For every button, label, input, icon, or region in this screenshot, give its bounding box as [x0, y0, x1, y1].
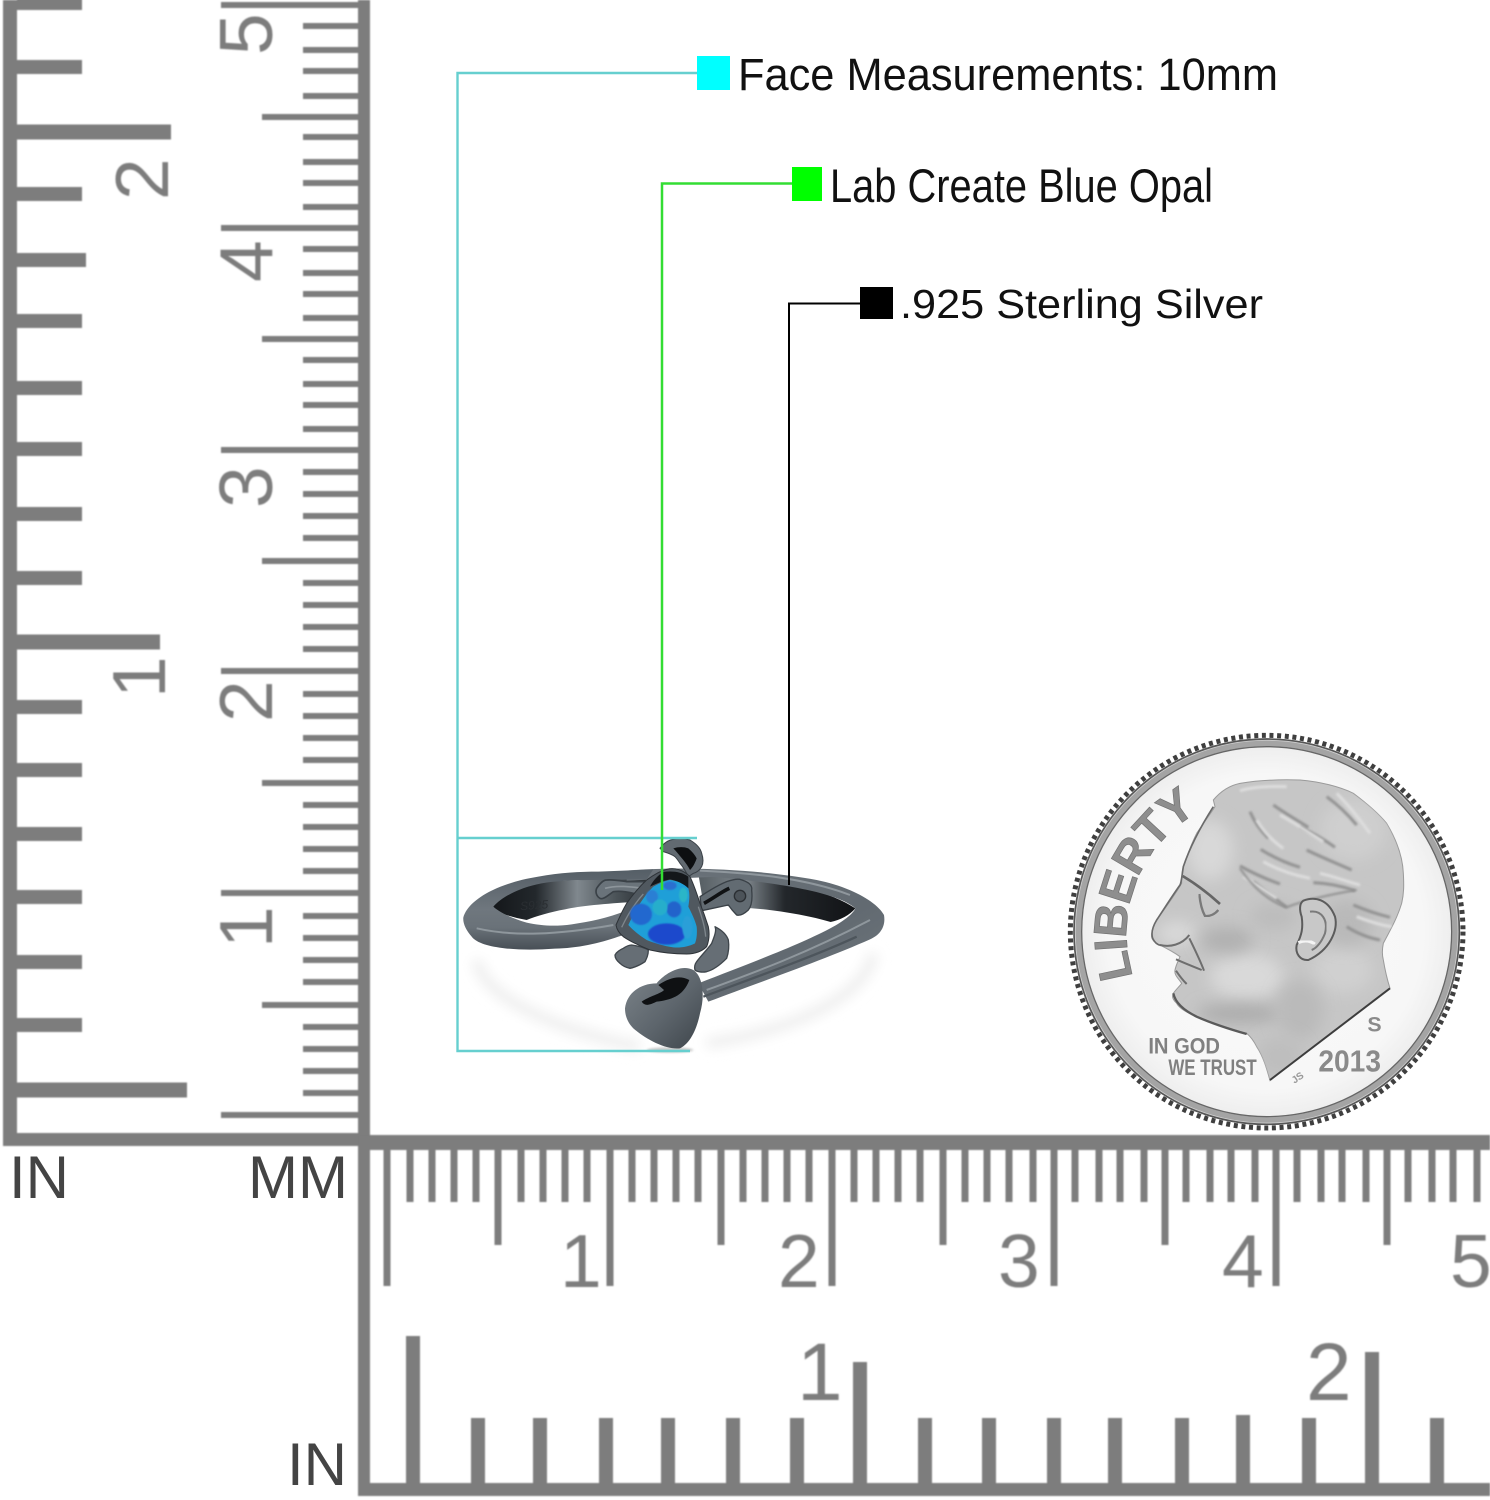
shell rim [616, 869, 709, 954]
shadow below heart [647, 1047, 693, 1053]
unit labels: IN [9, 1144, 69, 1211]
rotated scale numbers: 2 [204, 680, 288, 722]
vertical ruler: left side inches and millimetres [3, 0, 370, 1146]
inch numbers: 1 [797, 1327, 843, 1418]
coin field [1082, 747, 1452, 1117]
top edge behind turtle [627, 869, 720, 881]
face profile edge [1152, 807, 1213, 945]
rotated scale numbers [97, 13, 288, 948]
measurement bracket: face height [458, 73, 697, 1051]
hair strands light [1240, 786, 1392, 927]
leader line: metal [789, 304, 860, 885]
dime for scale: JS [1290, 1070, 1306, 1086]
black swatch [860, 287, 893, 319]
left inner wall [493, 877, 647, 920]
dime for scale [1068, 732, 1466, 1130]
right band and arm [653, 869, 884, 1002]
legend: metal: .925 Sterling Silver [900, 281, 1263, 327]
lower right flipper [695, 927, 729, 972]
unit labels [9, 1144, 348, 1498]
eyebrow and eye [1183, 876, 1220, 904]
millimetre ticks [221, 5, 358, 1115]
left band [463, 869, 653, 950]
neck truncation edge [1270, 988, 1390, 1080]
nose and mouth [1160, 935, 1204, 984]
millimetre numbers: 2 [778, 1219, 820, 1303]
ruler frame [358, 1135, 1490, 1496]
turtle [596, 839, 752, 972]
unit labels: IN [287, 1431, 347, 1498]
hairline shadow [1240, 868, 1357, 907]
shadows [1200, 927, 1253, 953]
legend: face measurements: Face Measurements: 10mm [738, 49, 1278, 100]
ear [1296, 899, 1336, 960]
cyan swatch [697, 56, 730, 90]
dime for scale: 2013 [1318, 1045, 1381, 1079]
ring shadow [477, 953, 873, 1047]
inch numbers [797, 1327, 1352, 1418]
chin and jaw edge [1173, 993, 1247, 1034]
millimetre numbers: 3 [998, 1219, 1040, 1303]
rotated scale numbers: 3 [204, 466, 288, 508]
millimetre numbers: 1 [560, 1219, 602, 1303]
long inch ticks [17, 132, 187, 1090]
horizontal ruler: bottom millimetres and inches [358, 1135, 1490, 1496]
ring photo: black sterling silver turtle bypass ring with blue opal [463, 839, 884, 1053]
right inner wall [698, 874, 855, 922]
band highlights [477, 871, 870, 990]
rotated scale numbers: 4 [204, 240, 288, 282]
coin rim [1070, 735, 1463, 1128]
millimetre numbers [560, 1219, 1490, 1303]
green swatch [792, 167, 822, 201]
millimetre numbers: 4 [1222, 1219, 1264, 1303]
upper right flipper [700, 879, 752, 915]
head [660, 839, 703, 877]
facial details [1152, 807, 1390, 1080]
heart end of the band [625, 968, 703, 1049]
hair strands dark [1240, 797, 1390, 940]
dime for scale: S [1367, 1013, 1382, 1037]
leader line: opal [662, 184, 793, 890]
legend: stone: Lab Create Blue Opal [830, 159, 1213, 212]
rotated scale numbers: 1 [204, 906, 288, 948]
millimetre ticks [387, 1150, 1477, 1286]
ruler frame [3, 0, 370, 1146]
blue opal heart [628, 880, 697, 947]
coin lettering: LIBERTY [1094, 785, 1188, 981]
Roosevelt bust [1152, 780, 1404, 1081]
inch numbers: 2 [1306, 1327, 1352, 1418]
highlights [1187, 820, 1233, 880]
inch ticks [413, 1336, 1437, 1483]
rotated scale numbers: 1 [97, 656, 181, 698]
dime for scale: IN GOD [1148, 1033, 1220, 1058]
rotated scale numbers: 5 [204, 13, 288, 55]
lower left flipper [615, 945, 648, 968]
dime for scale: WE TRUST [1168, 1055, 1257, 1080]
rotated scale numbers: 2 [100, 158, 184, 200]
hallmark: S925 [520, 897, 549, 913]
inch ticks [17, 3, 86, 1025]
unit labels: MM [248, 1144, 348, 1211]
upper left flipper [596, 880, 653, 899]
